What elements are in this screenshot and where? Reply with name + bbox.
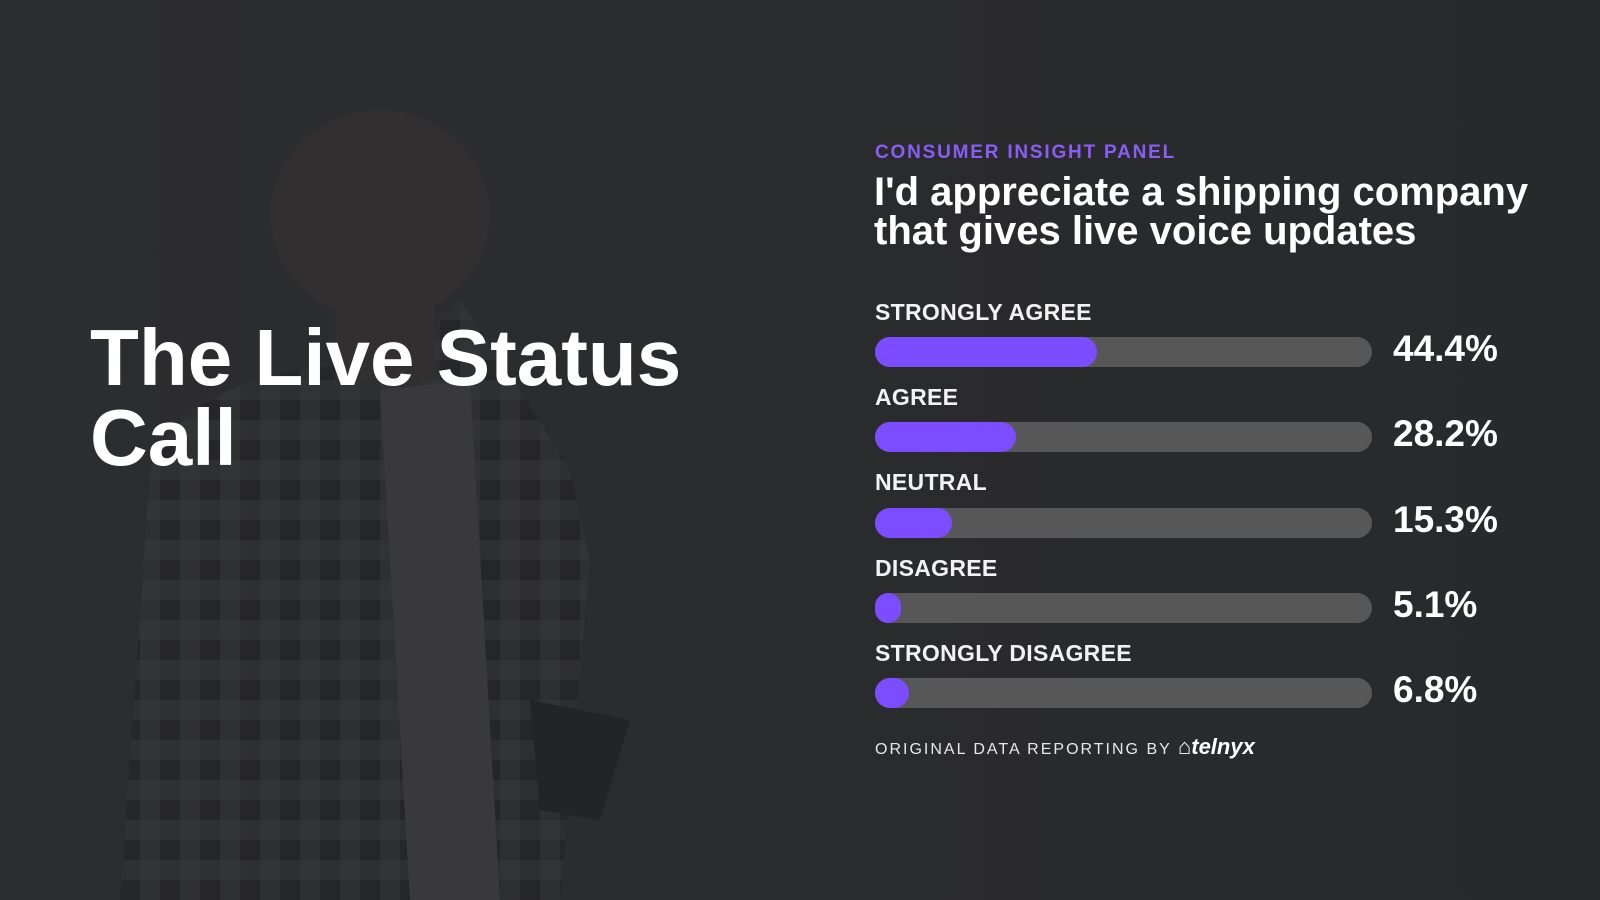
bar chart: 6.8% <box>1393 669 1477 710</box>
title <box>90 313 681 482</box>
bar chart: AGREE <box>875 384 958 410</box>
bar chart: 44.4% <box>1393 328 1498 369</box>
bar chart: NEUTRAL <box>875 469 987 495</box>
bar chart: 28.2% <box>1393 413 1498 454</box>
bar chart: 5.1% <box>1393 584 1477 625</box>
title: Call <box>90 393 237 482</box>
bar chart: 15.3% <box>1393 499 1498 540</box>
eyebrow: consumer insight panel: CONSUMER INSIGHT PANEL <box>875 142 1176 163</box>
row: strongly disagree <box>875 640 1477 710</box>
title: The Live Status <box>90 313 681 402</box>
row: strongly agree <box>875 299 1498 369</box>
bar chart: DISAGREE <box>875 555 998 581</box>
bar chart: STRONGLY AGREE <box>875 299 1092 325</box>
bar chart: STRONGLY DISAGREE <box>875 640 1132 666</box>
row: neutral <box>875 469 1498 540</box>
footer: data source: ORIGINAL DATA REPORTING BY ⌂telnyx <box>875 734 1255 759</box>
question heading: I'd appreciate a shipping company that gives live voice updates <box>874 170 1528 253</box>
row: disagree <box>875 555 1477 625</box>
row: agree <box>875 384 1498 454</box>
